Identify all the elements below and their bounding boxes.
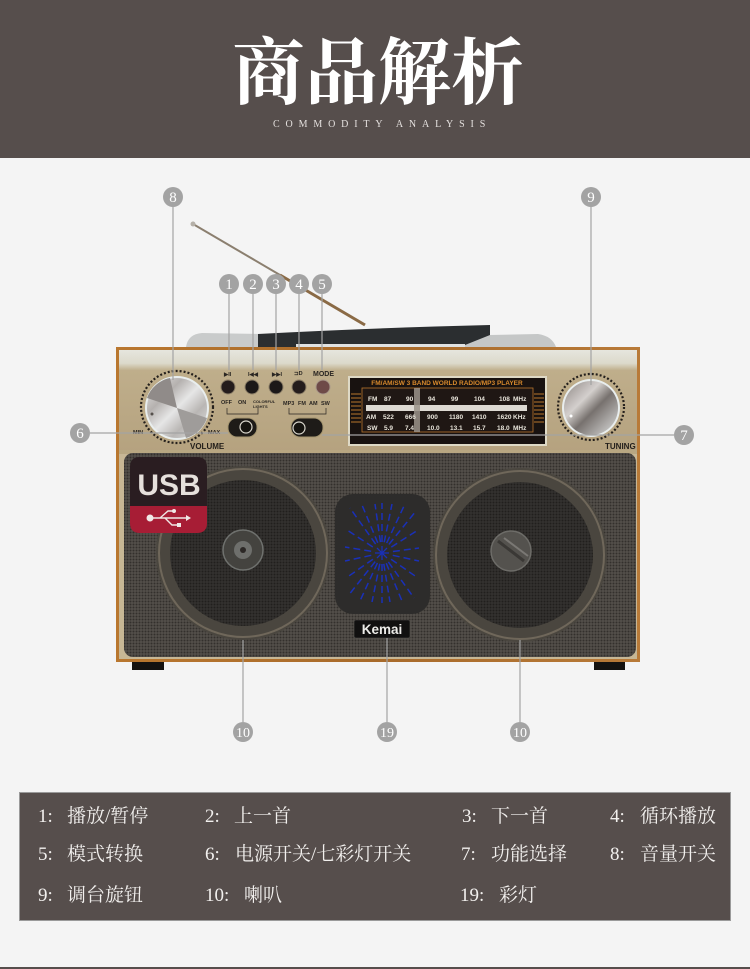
legend panel: 8: (610, 844, 625, 865)
callout 10 left: 10 (236, 726, 250, 741)
right speaker (433, 468, 607, 642)
transport buttons: I◀◀ (248, 371, 259, 378)
USB badge (130, 457, 207, 533)
callout 2: 2 (249, 277, 257, 293)
callout 8: 8 (169, 190, 177, 206)
transport buttons: ⊐D (294, 370, 303, 377)
callout 6 (70, 423, 90, 443)
legend panel: 彩灯 (499, 884, 537, 906)
legend panel: 19: (460, 885, 484, 906)
tuning dial display: 666 (405, 414, 416, 421)
callout 2 (243, 274, 263, 294)
legend panel: 循环播放 (640, 805, 716, 827)
left speaker (156, 466, 330, 640)
tuning dial display: 900 (427, 414, 438, 421)
transport buttons: MODE (313, 371, 334, 378)
carrying handle (186, 325, 556, 348)
transport buttons: OFF (221, 400, 233, 406)
colour light panel (335, 494, 430, 614)
callout 7: 7 (680, 428, 688, 444)
volume knob: VOLUME (190, 442, 225, 451)
tuning dial display: 1410 (472, 414, 487, 421)
header band (0, 0, 750, 158)
tuning dial display: 90 (406, 396, 414, 403)
callout 6: 6 (76, 426, 84, 442)
callout lines (90, 207, 674, 722)
legend panel: 10: (205, 885, 229, 906)
legend panel: 功能选择 (491, 843, 567, 865)
callout 3: 3 (272, 277, 280, 293)
legend panel (20, 792, 730, 920)
control panel (119, 350, 637, 452)
tuning dial display: 87 (384, 396, 392, 403)
transport buttons: LIGHTS (253, 404, 268, 409)
transport buttons: MP3 (283, 401, 294, 407)
antenna (190, 222, 365, 325)
tuning dial display: 1180 (449, 414, 463, 421)
tuning dial display: AM (366, 414, 376, 421)
callout 9 (581, 187, 601, 207)
legend panel: 4: (610, 806, 625, 827)
transport buttons (221, 370, 334, 414)
tuning dial display: 108 (499, 396, 510, 403)
tuning dial display: FM (368, 396, 377, 403)
legend panel: 6: (205, 844, 220, 865)
callout 5: 5 (318, 277, 326, 293)
legend panel: 喇叭 (244, 884, 282, 906)
callout 10 left (233, 722, 253, 742)
volume knob (133, 371, 225, 451)
transport buttons: ▶▶I (271, 371, 282, 378)
transport buttons: ▶II (223, 371, 232, 378)
callout 4 (289, 274, 309, 294)
tuning dial display: 18.0 (497, 425, 510, 432)
callout 19 (377, 722, 397, 742)
transport buttons: AM (309, 401, 318, 407)
legend panel: 下一首 (491, 805, 548, 827)
tuning dial display: KHz (513, 414, 526, 421)
slide switches (228, 418, 323, 437)
transport buttons: COLORFUL (253, 399, 276, 404)
feet (132, 660, 625, 670)
transport buttons: ON (238, 400, 246, 406)
callout 1 (219, 274, 239, 294)
legend panel: 1: (38, 806, 53, 827)
tuning dial display: 15.7 (473, 425, 486, 432)
legend panel: 上一首 (234, 805, 291, 827)
callout 4: 4 (295, 277, 303, 293)
legend panel: 7: (461, 844, 476, 865)
tuning knob (558, 374, 636, 451)
subtitle: COMMODITY ANALYSIS (273, 119, 491, 130)
legend panel: 电源开关/七彩灯开关 (235, 843, 411, 865)
callout 8 (163, 187, 183, 207)
callout 7 (674, 425, 694, 445)
tuning dial display: SW (367, 425, 378, 432)
legend panel: 2: (205, 806, 220, 827)
tuning dial display: MHz (513, 425, 527, 432)
legend panel: 播放/暂停 (67, 805, 148, 827)
tuning dial display: 522 (383, 414, 394, 421)
volume knob: MAX (208, 430, 221, 436)
tuning knob: TUNING (605, 442, 636, 451)
tuning dial display: 104 (474, 396, 485, 403)
bottom rule (0, 967, 750, 969)
transport buttons: FM (298, 401, 306, 407)
callout 10 right: 10 (513, 726, 527, 741)
transport buttons: SW (321, 401, 331, 407)
tuning dial display: FM/AM/SW 3 BAND WORLD RADIO/MP3 PLAYER (371, 380, 523, 387)
callout 5 (312, 274, 332, 294)
callout 3 (266, 274, 286, 294)
callout 1: 1 (225, 277, 233, 293)
tuning dial display: 99 (451, 396, 459, 403)
callout 9: 9 (587, 190, 595, 206)
legend panel: 9: (38, 885, 53, 906)
tuning dial display: 10.0 (427, 425, 440, 432)
title: 商品解析 (232, 14, 524, 119)
tuning dial display: 5.9 (384, 425, 393, 432)
callout 19: 19 (380, 726, 394, 741)
volume knob: MIN (133, 430, 143, 436)
legend panel: 调台旋钮 (67, 884, 143, 906)
Kemai badge (354, 620, 410, 638)
Kemai badge: Kemai (362, 622, 402, 637)
tuning dial display (348, 376, 547, 446)
tuning dial display: 94 (428, 396, 436, 403)
callout 10 right (510, 722, 530, 742)
tuning dial display: 7.4 (405, 425, 414, 432)
legend panel: 5: (38, 844, 53, 865)
legend panel: 模式转换 (67, 843, 143, 865)
tuning dial display: 1620 (497, 414, 512, 421)
radio body (116, 347, 640, 662)
tuning dial display: 13.1 (450, 425, 463, 432)
legend panel: 音量开关 (640, 843, 716, 865)
wood case (116, 347, 640, 662)
tuning dial display: MHz (513, 396, 527, 403)
legend panel: 3: (462, 806, 477, 827)
speaker grille (124, 453, 636, 657)
USB badge: USB (137, 469, 201, 502)
